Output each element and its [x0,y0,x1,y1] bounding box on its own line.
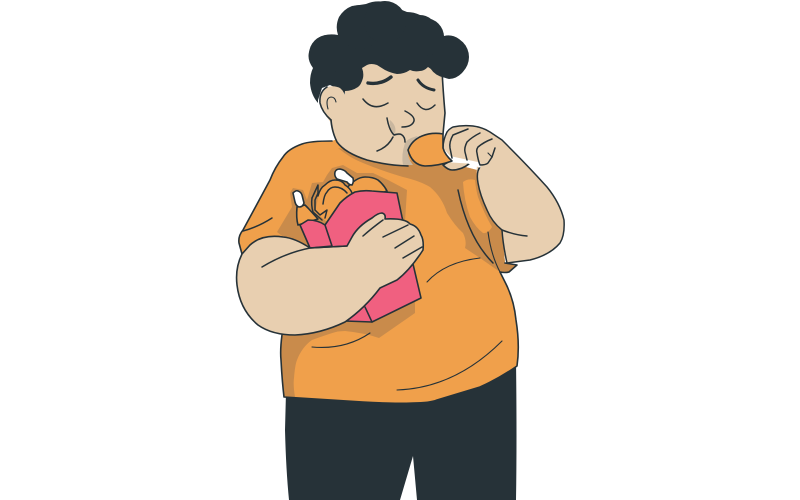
hair [308,1,469,103]
right edge of face [442,70,445,134]
shirt [239,130,518,403]
head [308,1,469,166]
drumstick being eaten [408,133,452,166]
box of fried chicken [293,169,421,322]
eyes and eyebrows [363,77,435,110]
nose and mouth [377,111,414,151]
face [330,55,445,165]
arm holding box [237,213,423,335]
finger lines [262,220,422,267]
arm raised to mouth [443,126,564,263]
shirt highlight by sleeve [463,179,492,233]
ear [320,86,346,125]
fingers [450,129,527,236]
thumb [443,160,470,170]
shirt crease lines [243,190,502,390]
cheek shadows [390,120,418,165]
pink box panels [300,191,421,322]
shirt outline [239,141,518,403]
bone in fist [452,157,480,167]
chicken pieces in box [293,169,387,225]
jaw line [331,120,408,166]
shirt shadows [277,148,517,397]
trousers [285,360,516,500]
